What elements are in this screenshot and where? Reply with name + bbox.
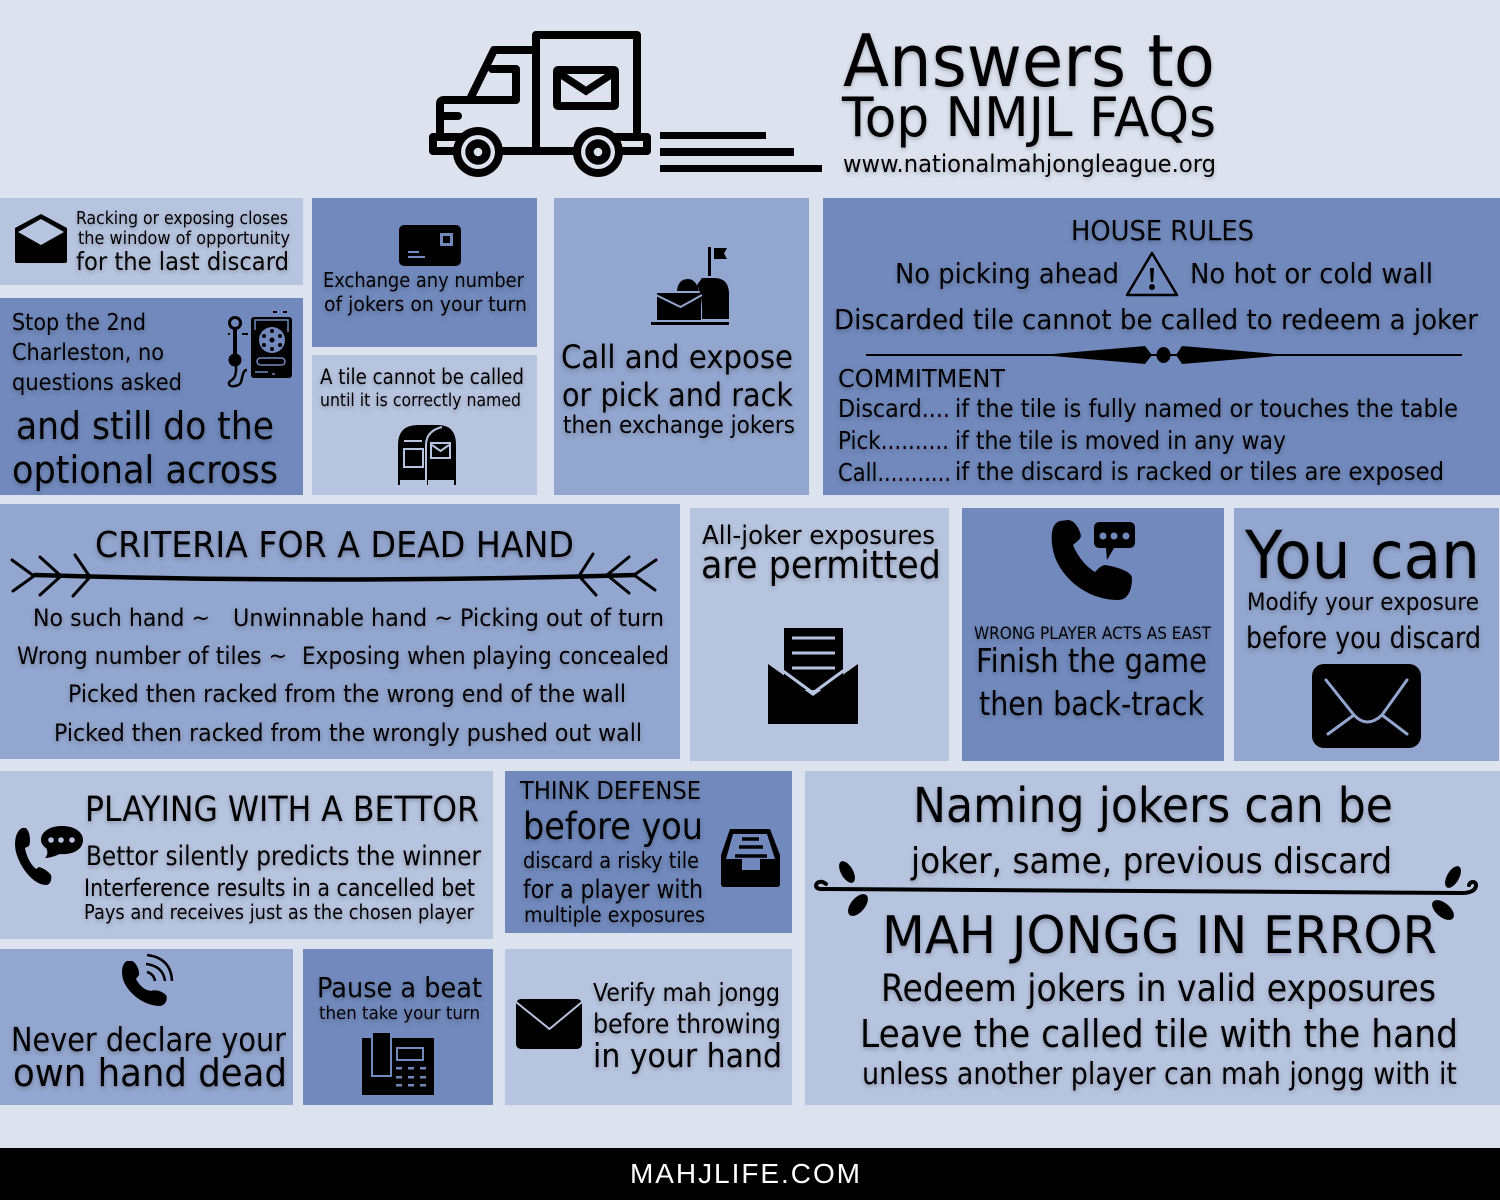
panel: criteria for a dead hand xyxy=(0,504,680,759)
text: pause a beat xyxy=(317,971,482,1024)
icon: mailbox with flag xyxy=(651,247,729,325)
text: stop the Charleston: optional across xyxy=(12,448,278,492)
text: dead hand criteria: Exposing when playing concealed xyxy=(302,642,669,670)
text: all-joker exposures: All-joker exposures xyxy=(702,521,935,551)
icon: envelope xyxy=(516,999,582,1049)
text: tile named: A tile cannot be called xyxy=(320,365,524,389)
text: call and expose: Call and expose xyxy=(561,338,793,376)
text: commitment: if the discard is racked or tiles are exposed xyxy=(955,457,1444,486)
title: www.nationalmahjongleague.org xyxy=(843,150,1216,178)
icon: rotary pay phone xyxy=(228,312,292,386)
text: think defense: discard a risky tile xyxy=(523,849,699,874)
text: wrong player acts as east xyxy=(974,624,1212,723)
text: bettor rules: PLAYING WITH A BETTOR xyxy=(85,790,479,830)
text: commitment: if the tile is fully named or touches the table xyxy=(955,394,1458,423)
text: verify mah jongg: Verify mah jongg xyxy=(593,978,780,1007)
text: stop the Charleston: questions asked xyxy=(12,370,182,396)
text: dead hand criteria: Picked then racked from the wrong end of the wall xyxy=(68,680,626,708)
footer bar xyxy=(0,1148,1500,1200)
text: you can modify: You can xyxy=(1244,517,1480,594)
icon: envelope with letter xyxy=(768,628,858,724)
text: stop the Charleston: Stop the 2nd xyxy=(12,310,146,336)
panel: verify mah jongg xyxy=(505,949,792,1105)
panel: last discard xyxy=(0,198,303,285)
text: verify mah jongg: in your hand xyxy=(593,1036,782,1075)
panel: stop the Charleston xyxy=(0,298,303,495)
text: stop the Charleston xyxy=(12,310,278,492)
title xyxy=(841,19,1216,178)
text: never declare dead: own hand dead xyxy=(13,1051,287,1095)
text: pause a beat: Pause a beat xyxy=(317,971,482,1004)
text: mah jongg in error: Leave the called tile with the hand xyxy=(860,1012,1458,1056)
arrow divider xyxy=(12,554,656,596)
text: exchange jokers xyxy=(323,268,527,316)
icon: postcard xyxy=(399,225,461,266)
title: Top NMJL FAQs xyxy=(841,86,1216,149)
text: think defense: for a player with xyxy=(523,875,703,905)
text: dead hand criteria: Unwinnable hand ~ Picking out of turn xyxy=(233,604,664,632)
heading: house rules: HOUSE RULES xyxy=(1071,214,1254,247)
text: never declare dead: Never declare your xyxy=(11,1020,286,1059)
icon: phone with speech bubble xyxy=(1052,520,1135,600)
text: last discard: for the last discard xyxy=(76,247,289,276)
text: commitment: if the tile is moved in any way xyxy=(955,426,1286,455)
panel: wrong player acts as east xyxy=(962,508,1224,761)
text: wrong player acts as east: Finish the game xyxy=(976,641,1207,680)
text: bettor rules: Bettor silently predicts the winner xyxy=(86,841,482,872)
text: wrong player acts as east: WRONG PLAYER ACTS AS EAST xyxy=(974,624,1212,643)
text: dead hand criteria xyxy=(17,604,669,747)
text: commitment xyxy=(838,364,1458,487)
text: think defense xyxy=(519,776,705,927)
text: naming jokers: Naming jokers can be xyxy=(913,778,1393,834)
text: stop the Charleston: and still do the xyxy=(16,404,274,448)
panel: tile named xyxy=(312,355,537,495)
panel: call and expose xyxy=(554,198,809,495)
text: naming jokers: joker, same, previous discard xyxy=(910,841,1392,882)
text: bettor rules xyxy=(84,790,482,924)
text: dead hand criteria: Wrong number of tiles ~ xyxy=(17,642,287,670)
footer bar: MAHJLIFE.COM xyxy=(630,1158,860,1189)
text: think defense: multiple exposures xyxy=(524,903,705,927)
text: no hot or cold wall: No hot or cold wall xyxy=(1190,257,1433,290)
panel: naming jokers and mah jongg in error xyxy=(805,771,1500,1105)
text: you can modify xyxy=(1244,517,1481,655)
text: naming jokers xyxy=(910,778,1393,882)
text: you can modify: Modify your exposure xyxy=(1247,588,1479,616)
panel: pause a beat xyxy=(303,949,493,1105)
text: bettor rules: Pays and receives just as the chosen player xyxy=(84,900,475,924)
text: verify mah jongg: before throwing xyxy=(593,1009,781,1040)
text: bettor rules: Interference results in a cancelled bet xyxy=(84,874,475,902)
text: call and expose xyxy=(561,338,795,439)
icon: phone with speech bubble xyxy=(15,826,83,885)
icon: inbox tray xyxy=(721,829,780,887)
text: tile named: until it is correctly named xyxy=(320,390,521,411)
text: think defense: THINK DEFENSE xyxy=(519,776,701,805)
icon: mailboxes xyxy=(398,425,456,485)
text: commitment: Pick.......... xyxy=(838,426,949,455)
icon: desk phone xyxy=(362,1033,434,1095)
text: stop the Charleston: Charleston, no xyxy=(12,340,164,366)
text: pause a beat: then take your turn xyxy=(319,1003,480,1024)
text: dead hand criteria: Picked then racked from the wrongly pushed out wall xyxy=(54,719,642,747)
text: last discard xyxy=(76,208,290,276)
icon: ringing phone xyxy=(122,955,172,1006)
panel: all-joker exposures xyxy=(690,508,949,761)
panel: house rules and commitment xyxy=(823,198,1500,495)
text: commitment: COMMITMENT xyxy=(838,364,1006,393)
panel: exchange jokers xyxy=(312,198,537,347)
text: commitment: Call........... xyxy=(838,458,951,487)
icon: delivery truck with speed lines xyxy=(433,35,822,177)
divider ornament xyxy=(866,346,1462,364)
text: call and expose: or pick and rack xyxy=(562,376,793,414)
heading: criteria for a dead hand: CRITERIA FOR A DEAD HAND xyxy=(95,525,574,566)
icon: open envelope xyxy=(15,214,67,263)
text: all-joker exposures xyxy=(701,521,941,587)
text: never declare dead xyxy=(11,1020,287,1095)
text: mah jongg in error: Redeem jokers in valid exposures xyxy=(881,967,1436,1010)
icon: rounded envelope xyxy=(1312,664,1421,748)
panel: playing with a bettor xyxy=(0,771,493,939)
text: last discard: Racking or exposing closes xyxy=(76,208,288,229)
text: mah jongg in error xyxy=(860,906,1458,1092)
text: dead hand criteria: No such hand ~ xyxy=(33,604,210,632)
text: all-joker exposures: are permitted xyxy=(701,543,941,587)
text: call and expose: then exchange jokers xyxy=(563,411,795,439)
text: exchange jokers: of jokers on your turn xyxy=(324,292,527,316)
text: think defense: before you xyxy=(523,805,703,848)
text: last discard: the window of opportunity xyxy=(78,228,290,249)
panel: never declare dead xyxy=(0,949,293,1105)
text: no picking ahead: No picking ahead xyxy=(895,257,1119,290)
text: tile named xyxy=(320,365,524,411)
text: wrong player acts as east: then back-track xyxy=(979,684,1205,723)
text: commitment: Discard.... xyxy=(838,394,950,423)
text: exchange jokers: Exchange any number xyxy=(323,268,524,292)
title: Answers to xyxy=(843,19,1215,103)
text: mah jongg in error: MAH JONGG IN ERROR xyxy=(882,906,1437,966)
text: verify mah jongg xyxy=(593,978,782,1075)
panel: think defense xyxy=(505,771,792,933)
icon: warning triangle xyxy=(1127,253,1177,295)
panel: you can modify xyxy=(1234,508,1499,761)
flourish divider xyxy=(816,859,1476,924)
